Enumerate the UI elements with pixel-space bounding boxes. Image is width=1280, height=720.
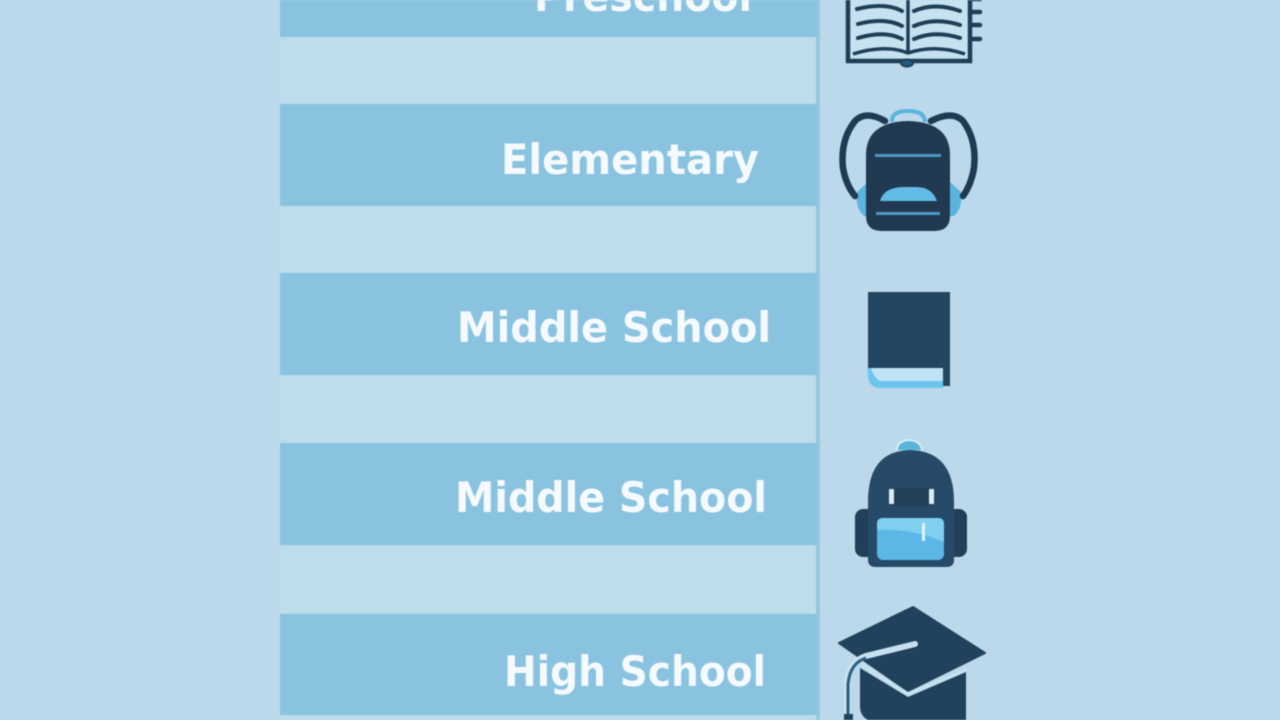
row: High School <box>280 614 817 715</box>
icon: graduation cap <box>839 607 985 720</box>
icon: closed book <box>868 292 950 388</box>
row: Middle School (second): Middle School <box>455 473 767 522</box>
row: Elementary <box>280 104 817 206</box>
row: Preschool <box>280 0 817 37</box>
row: Middle School (second) <box>280 443 817 545</box>
row: High School: High School <box>504 647 766 696</box>
icon: blue backpack <box>855 440 967 567</box>
row: Middle School (first): Middle School <box>457 303 771 352</box>
row: Elementary: Elementary <box>501 135 759 184</box>
row: Middle School (first) <box>280 273 817 375</box>
icon: dark backpack <box>842 111 975 231</box>
icon: open book <box>848 0 980 66</box>
